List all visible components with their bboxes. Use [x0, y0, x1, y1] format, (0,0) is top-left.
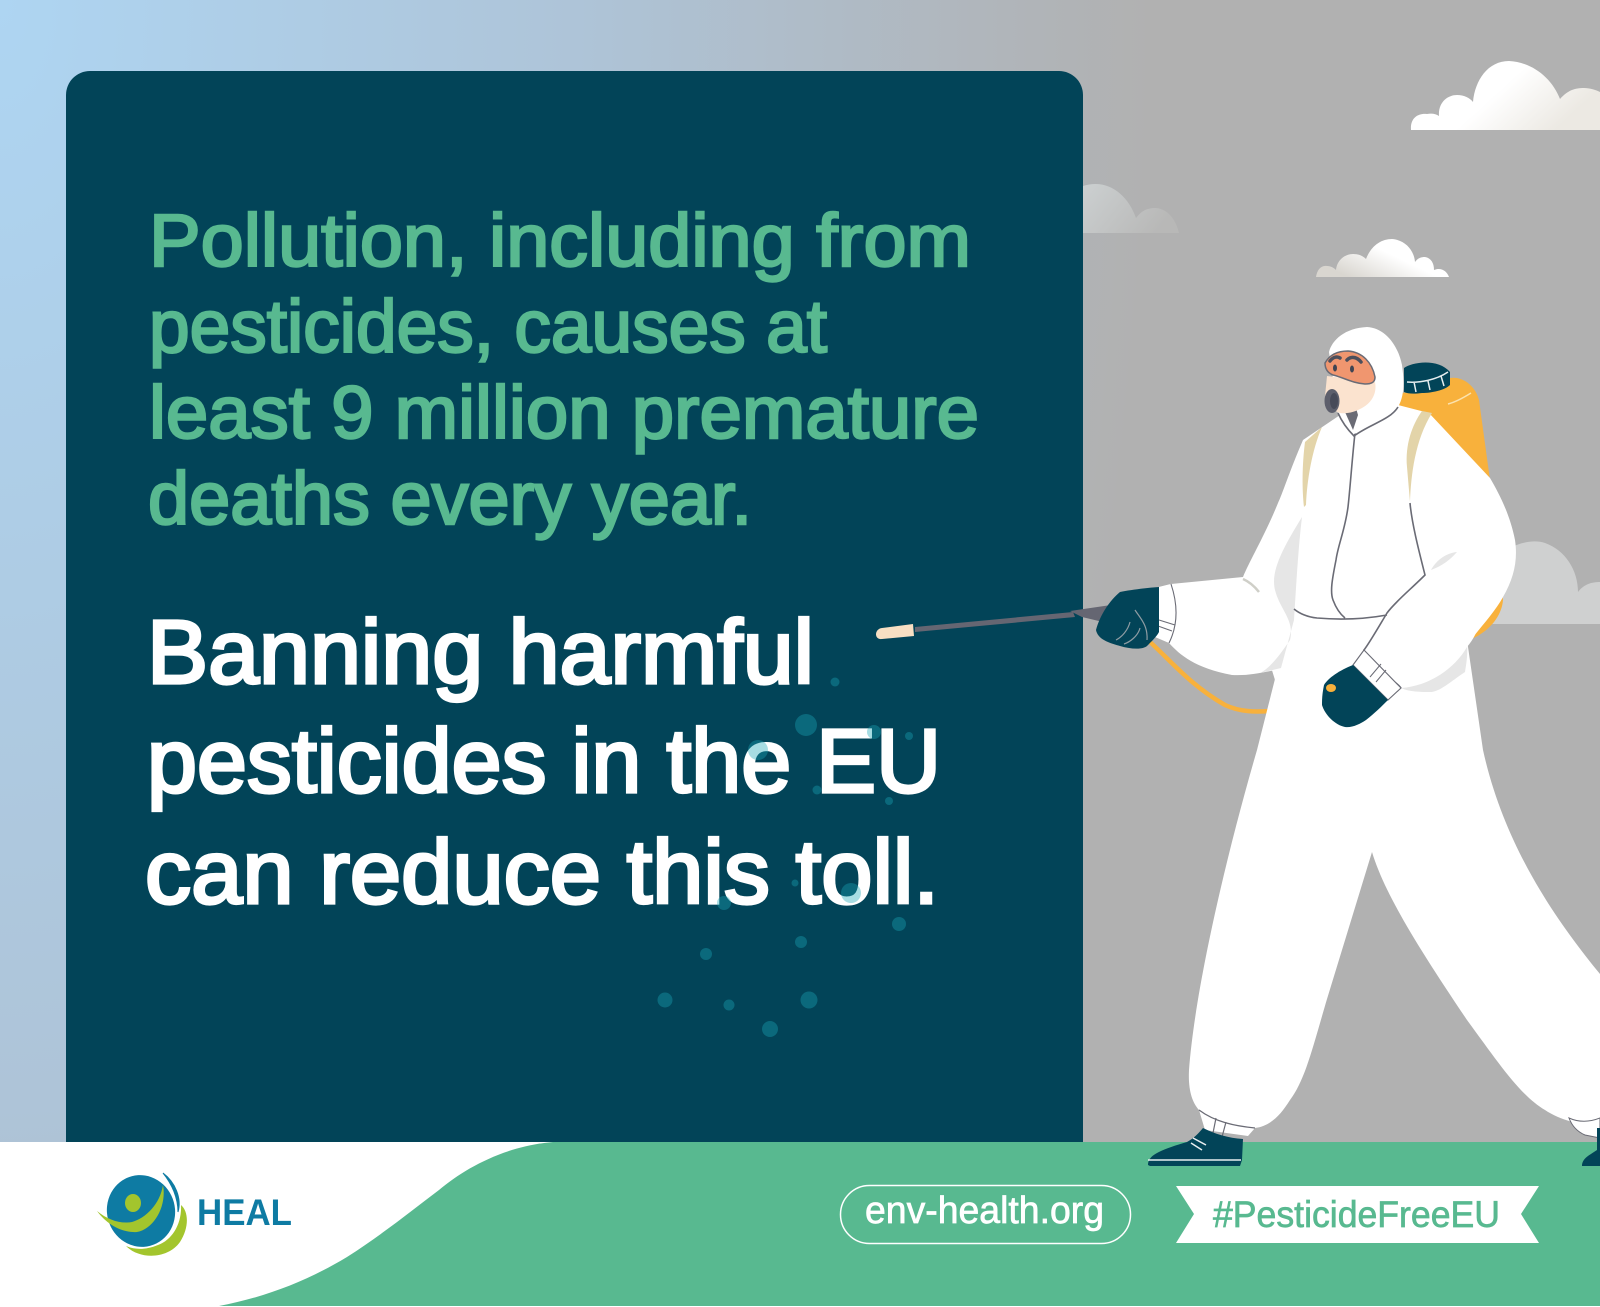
logo globe [99, 1167, 183, 1255]
heading: call to ban pesticides [145, 603, 941, 923]
left glove [1096, 587, 1159, 649]
suit seam lines [1294, 433, 1425, 688]
cloud: behind panel [1083, 184, 1179, 233]
hood [1329, 327, 1403, 434]
left shoe [1148, 1128, 1243, 1166]
heading: call to ban pesticides: pesticides in the EU [147, 712, 941, 812]
heading: call to ban pesticides: Banning harmful [147, 603, 814, 703]
hose [1150, 642, 1270, 711]
tank cap [1404, 362, 1450, 394]
torso and right arm [1243, 405, 1516, 691]
website pill: env-health.org [865, 1190, 1104, 1232]
suit shadow: right [1401, 645, 1467, 692]
harness straps [1303, 411, 1432, 507]
tank highlight [1448, 393, 1471, 404]
left trouser cuff details [1199, 1110, 1255, 1137]
logo wordmark: HEAL [197, 1192, 292, 1233]
logo green swoosh [97, 1185, 164, 1232]
collar lines [1338, 407, 1398, 436]
figure: worker in protective suit spraying [876, 327, 1600, 1166]
logo blue outer arc [163, 1173, 179, 1212]
logo: HEAL [97, 1167, 292, 1256]
hashtag ribbon [1176, 1186, 1539, 1243]
face and goggles [1324, 351, 1375, 413]
left shoe sole and laces [1148, 1138, 1241, 1160]
heading: call to ban pesticides: can reduce this toll. [145, 823, 939, 923]
heading: pollution statement: pesticides, causes at [149, 285, 827, 368]
heading: pollution statement: deaths every year. [148, 457, 752, 540]
dark panel [66, 71, 1083, 1143]
heading: pollution statement: least 9 million premature [149, 371, 979, 454]
right sleeve cuff [1353, 650, 1401, 700]
cloud: behind figure [1490, 541, 1600, 624]
neck opening [1345, 408, 1358, 430]
footer: green ground wave [219, 1142, 1600, 1306]
heading: pollution statement: Pollution, including from [149, 199, 971, 282]
spray wand [876, 605, 1111, 639]
logo figure head [125, 1194, 141, 1212]
right glove [1322, 665, 1388, 727]
right forearm [1353, 552, 1480, 688]
backpack tank [1398, 378, 1503, 640]
arm fold shadow [1431, 552, 1457, 570]
right trouser cuff [1569, 1118, 1600, 1138]
suit shadow: left [1260, 517, 1302, 673]
left sleeve cuff [1155, 584, 1176, 643]
website pill [840, 1186, 1130, 1244]
suit legs [1189, 600, 1600, 1136]
logo green outer arc [126, 1205, 187, 1256]
left sleeve fold [1243, 579, 1259, 592]
pesticide spray droplets [658, 678, 913, 1037]
right shoe [1582, 1128, 1600, 1166]
hashtag ribbon: #PesticideFreeEU [1213, 1194, 1500, 1235]
cloud: top right [1411, 61, 1600, 130]
footer: white base [0, 1142, 1600, 1307]
left arm [1159, 577, 1302, 675]
heading: pollution statement [148, 199, 979, 540]
cloud: small centre [1316, 239, 1449, 277]
